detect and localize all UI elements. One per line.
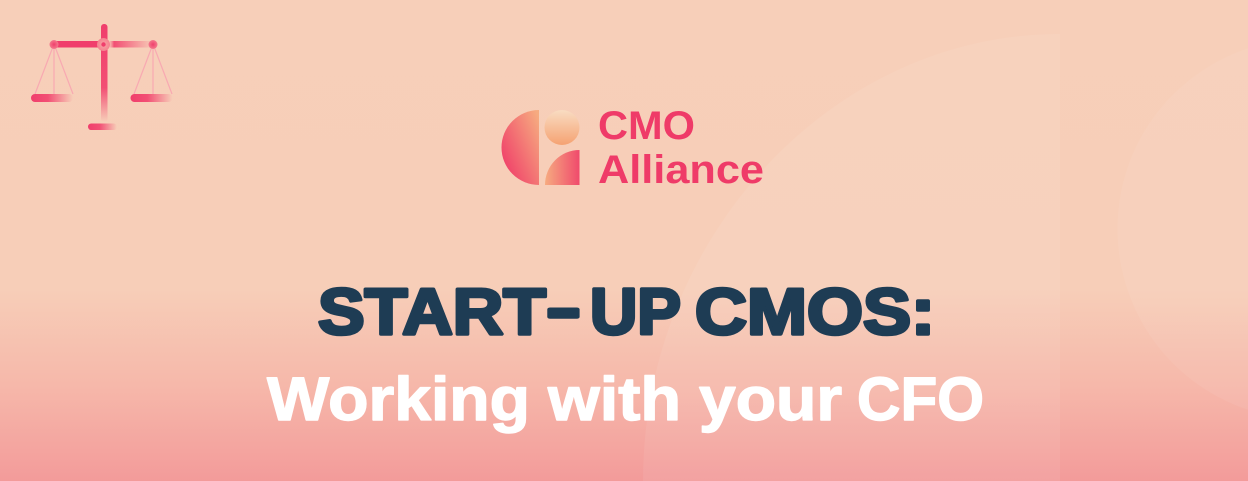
logo wordmark <box>598 104 764 192</box>
title: UP <box>590 275 681 348</box>
decorative circle <box>1118 38 1248 420</box>
title: START <box>318 275 546 348</box>
subtitle <box>267 365 984 433</box>
logo wordmark: Alliance <box>598 148 764 192</box>
logo wordmark: CMO <box>598 104 695 148</box>
title: CMOS: <box>695 275 935 348</box>
subtitle: CFO <box>857 365 984 433</box>
title <box>318 271 935 348</box>
title: - <box>546 271 581 344</box>
icon: balance scales <box>31 24 172 130</box>
subtitle: Working <box>267 365 530 433</box>
logo: CMO Alliance <box>502 104 764 192</box>
decorative quarter circle <box>643 34 1060 481</box>
subtitle: with <box>547 365 681 433</box>
logo mark <box>502 110 580 185</box>
subtitle: your <box>699 365 842 433</box>
